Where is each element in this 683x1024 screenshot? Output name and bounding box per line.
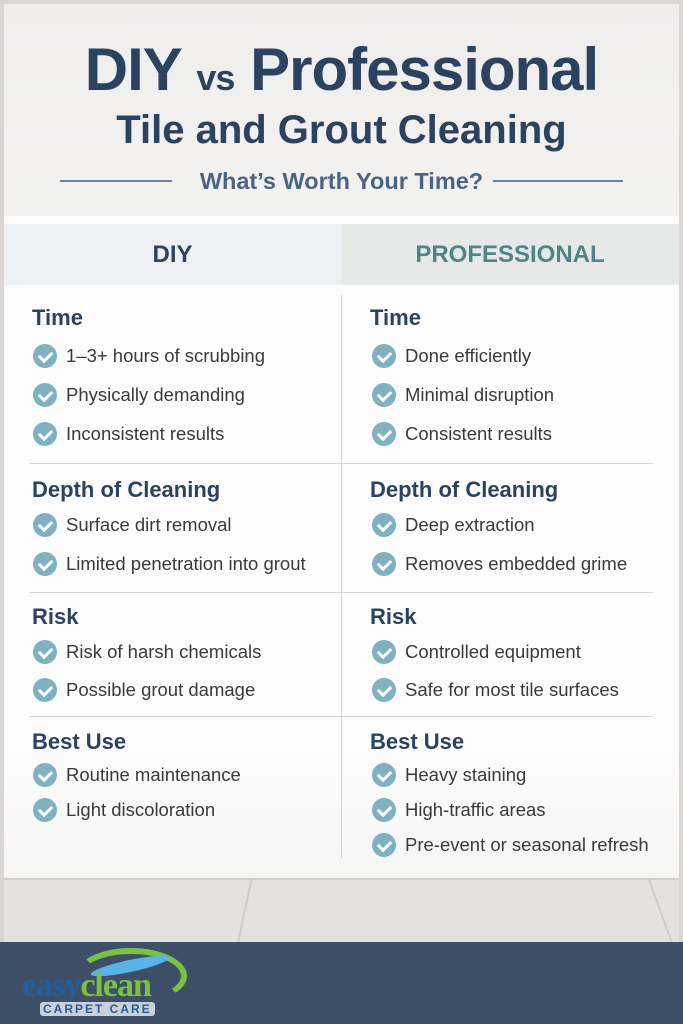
DIY column: 1–3+ hours of scrubbing: [66, 345, 265, 366]
DIY column: Surface dirt removal: [66, 514, 232, 535]
footer: [0, 942, 683, 1024]
column header: DIY: [4, 224, 341, 285]
tagline: What’s Worth Your Time?: [200, 168, 483, 194]
DIY column: Light discoloration: [66, 799, 215, 820]
Professional column: Pre-event or seasonal refresh: [405, 834, 649, 855]
DIY column: Depth of Cleaning: [32, 477, 220, 502]
DIY column: Best Use: [32, 729, 126, 754]
Professional column: Risk: [370, 604, 416, 629]
DIY column: Risk of harsh chemicals: [66, 641, 261, 662]
tile floor: [4, 878, 679, 942]
column header: professional: [341, 224, 679, 285]
Professional column: Deep extraction: [405, 514, 535, 535]
DIY column: Limited penetration into grout: [66, 553, 306, 574]
logo: easyclean: [22, 967, 151, 1004]
logo: CARPET CARE: [43, 1002, 152, 1016]
Professional column: Time: [370, 305, 421, 330]
Professional column: High-traffic areas: [405, 799, 546, 820]
Professional column: Best Use: [370, 729, 464, 754]
title: DIY vs Professional: [85, 36, 598, 103]
Professional column: Consistent results: [405, 423, 552, 444]
DIY column: [32, 305, 306, 822]
Professional column: Done efficiently: [405, 345, 531, 366]
column header: DIY: DIY: [152, 241, 192, 268]
DIY column: Time: [32, 305, 83, 330]
Professional column: Removes embedded grime: [405, 553, 627, 574]
Professional column: Minimal disruption: [405, 384, 554, 405]
Professional column: Heavy staining: [405, 764, 526, 785]
DIY column: Physically demanding: [66, 384, 245, 405]
subtitle heading: Tile and Grout Cleaning: [116, 108, 567, 152]
Professional column: Controlled equipment: [405, 641, 581, 662]
DIY column: Routine maintenance: [66, 764, 241, 785]
comparison table: [4, 216, 679, 878]
Professional column: Depth of Cleaning: [370, 477, 558, 502]
Professional column: [370, 305, 649, 857]
logo: [22, 948, 187, 1016]
DIY column: Inconsistent results: [66, 423, 224, 444]
column header: professional: PROFESSIONAL: [415, 241, 605, 268]
DIY column: Possible grout damage: [66, 679, 255, 700]
DIY column: Risk: [32, 604, 78, 629]
Professional column: Safe for most tile surfaces: [405, 679, 619, 700]
